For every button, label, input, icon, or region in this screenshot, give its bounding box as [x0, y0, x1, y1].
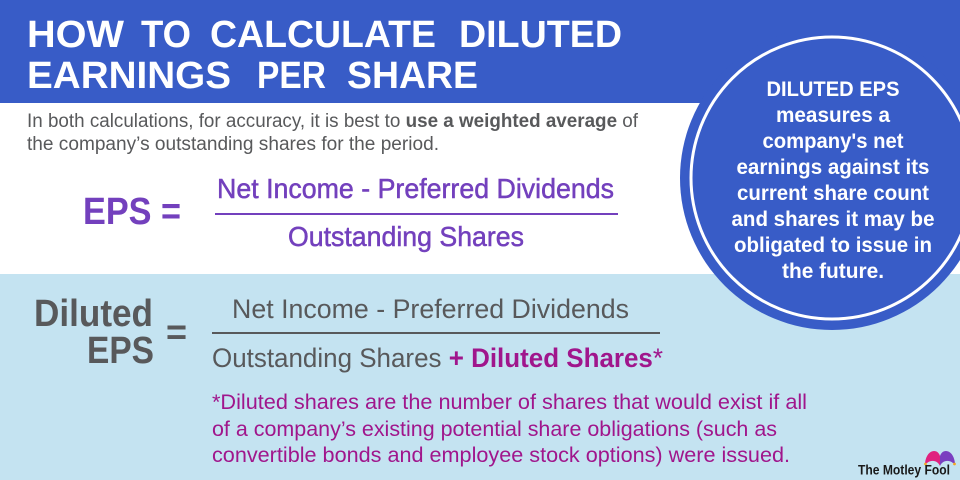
footnote: [212, 390, 807, 467]
intro text: In both calculations, for accuracy, it is best to use a weighted average of: [27, 111, 639, 132]
Diluted EPS formula: [34, 293, 663, 373]
intro text: [27, 111, 639, 155]
icon: jester hat: [924, 451, 956, 466]
intro text: the company’s outstanding shares for the period.: [27, 134, 439, 155]
footnote: of a company’s existing potential share obligations (such as: [212, 417, 777, 441]
callout text: [732, 78, 934, 283]
title: TO: [141, 14, 191, 56]
title: SHARE: [347, 55, 478, 97]
EPS numerator: Net Income - Preferred Dividends: [217, 173, 614, 204]
callout text: company's net: [762, 130, 904, 153]
Diluted EPS label: [34, 293, 154, 372]
EPS label: EPS =: [83, 191, 181, 233]
Diluted EPS denominator: Outstanding Shares + Diluted Shares*: [212, 343, 663, 373]
title: [27, 14, 622, 97]
Diluted EPS numerator: Net Income - Preferred Dividends: [232, 294, 629, 324]
equals sign: =: [166, 311, 187, 352]
footnote: *Diluted shares are the number of shares that would exist if all: [212, 390, 807, 414]
callout text: earnings against its: [736, 156, 930, 179]
Diluted EPS label: Diluted: [34, 293, 153, 335]
callout text: the future.: [782, 260, 884, 283]
callout text: current share count: [737, 182, 929, 205]
callout text: and shares it may be: [732, 208, 934, 231]
title: CALCULATE: [210, 14, 436, 56]
Diluted EPS label: EPS: [87, 330, 154, 372]
EPS denominator: Outstanding Shares: [288, 221, 524, 252]
callout text: DILUTED EPS: [766, 78, 900, 101]
panel: title banner: [0, 0, 960, 103]
callout circle: [680, 26, 960, 330]
callout text: measures a: [776, 104, 890, 127]
title: DILUTED: [459, 14, 622, 56]
title: PER: [257, 55, 326, 97]
title: HOW: [27, 14, 124, 56]
title: EARNINGS: [27, 55, 231, 97]
Diluted EPS fraction line: [212, 332, 660, 334]
footnote: convertible bonds and employee stock options) were issued.: [212, 443, 790, 467]
logo: The Motley Fool: [858, 451, 956, 478]
EPS formula: [83, 173, 618, 252]
callout text: obligated to issue in: [734, 234, 932, 257]
EPS fraction line: [215, 213, 618, 215]
panel: lower light blue background: [0, 274, 960, 480]
